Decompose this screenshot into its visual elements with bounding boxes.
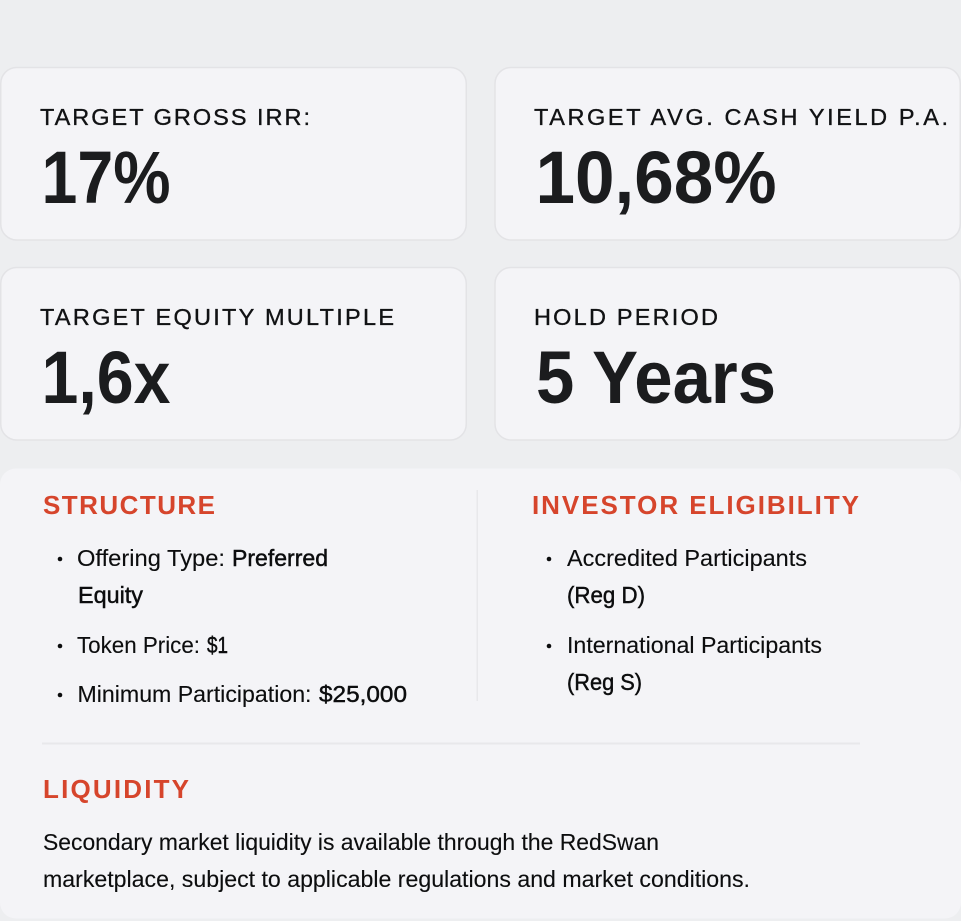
list item: token price: $1 [207, 632, 228, 658]
list item: accredited participants: (Reg D) [567, 582, 645, 608]
panel: details [0, 468, 961, 918]
liquidity description: marketplace, subject to applicable regulations and market conditions. [43, 866, 750, 892]
list item: offering type: Offering Type: [77, 545, 225, 571]
card: hold period [495, 268, 960, 440]
value: 17%: 17% [42, 136, 170, 219]
heading: structure: STRUCTURE [43, 490, 215, 520]
section: liquidity [43, 774, 750, 892]
list item: international participants: International Participants [567, 632, 822, 658]
list item: minimum participation: Minimum Participation: [78, 681, 312, 707]
label: target gross IRR: TARGET GROSS IRR: [40, 104, 310, 130]
list item: minimum participation [58, 681, 407, 707]
card: target gross IRR [1, 68, 466, 240]
value: 1,6x: 1,6x [42, 336, 170, 419]
label: target equity multiple: TARGET EQUITY MULTIPLE [40, 304, 394, 330]
value: 5 Years: 5 Years [536, 336, 776, 419]
heading: liquidity: LIQUIDITY [43, 774, 189, 804]
section: structure [43, 490, 407, 707]
card: target equity multiple [1, 268, 466, 440]
list item: minimum participation: $25,000 [319, 681, 407, 707]
list item: token price: Token Price: [77, 632, 200, 658]
list item: offering type: Preferred [232, 545, 328, 571]
card: target average cash yield [495, 68, 960, 240]
liquidity description [43, 829, 750, 892]
list item: international participants [547, 632, 822, 695]
list item: offering type: Equity [78, 582, 143, 608]
list item: accredited participants [547, 545, 807, 608]
heading: investor eligibility: INVESTOR ELIGIBILITY [532, 490, 859, 520]
liquidity description: Secondary market liquidity is available through the RedSwan [43, 829, 659, 855]
horizontal divider [42, 742, 860, 744]
label: target average cash yield: TARGET AVG. CASH YIELD P.A. [534, 104, 948, 130]
list item: accredited participants: Accredited Participants [567, 545, 807, 571]
section: investor eligibility [532, 490, 859, 695]
label: hold period: HOLD PERIOD [534, 304, 718, 330]
list item: offering type [58, 545, 328, 608]
column divider [476, 490, 478, 701]
list item: international participants: (Reg S) [567, 669, 642, 695]
value: 10,68%: 10,68% [536, 136, 776, 219]
